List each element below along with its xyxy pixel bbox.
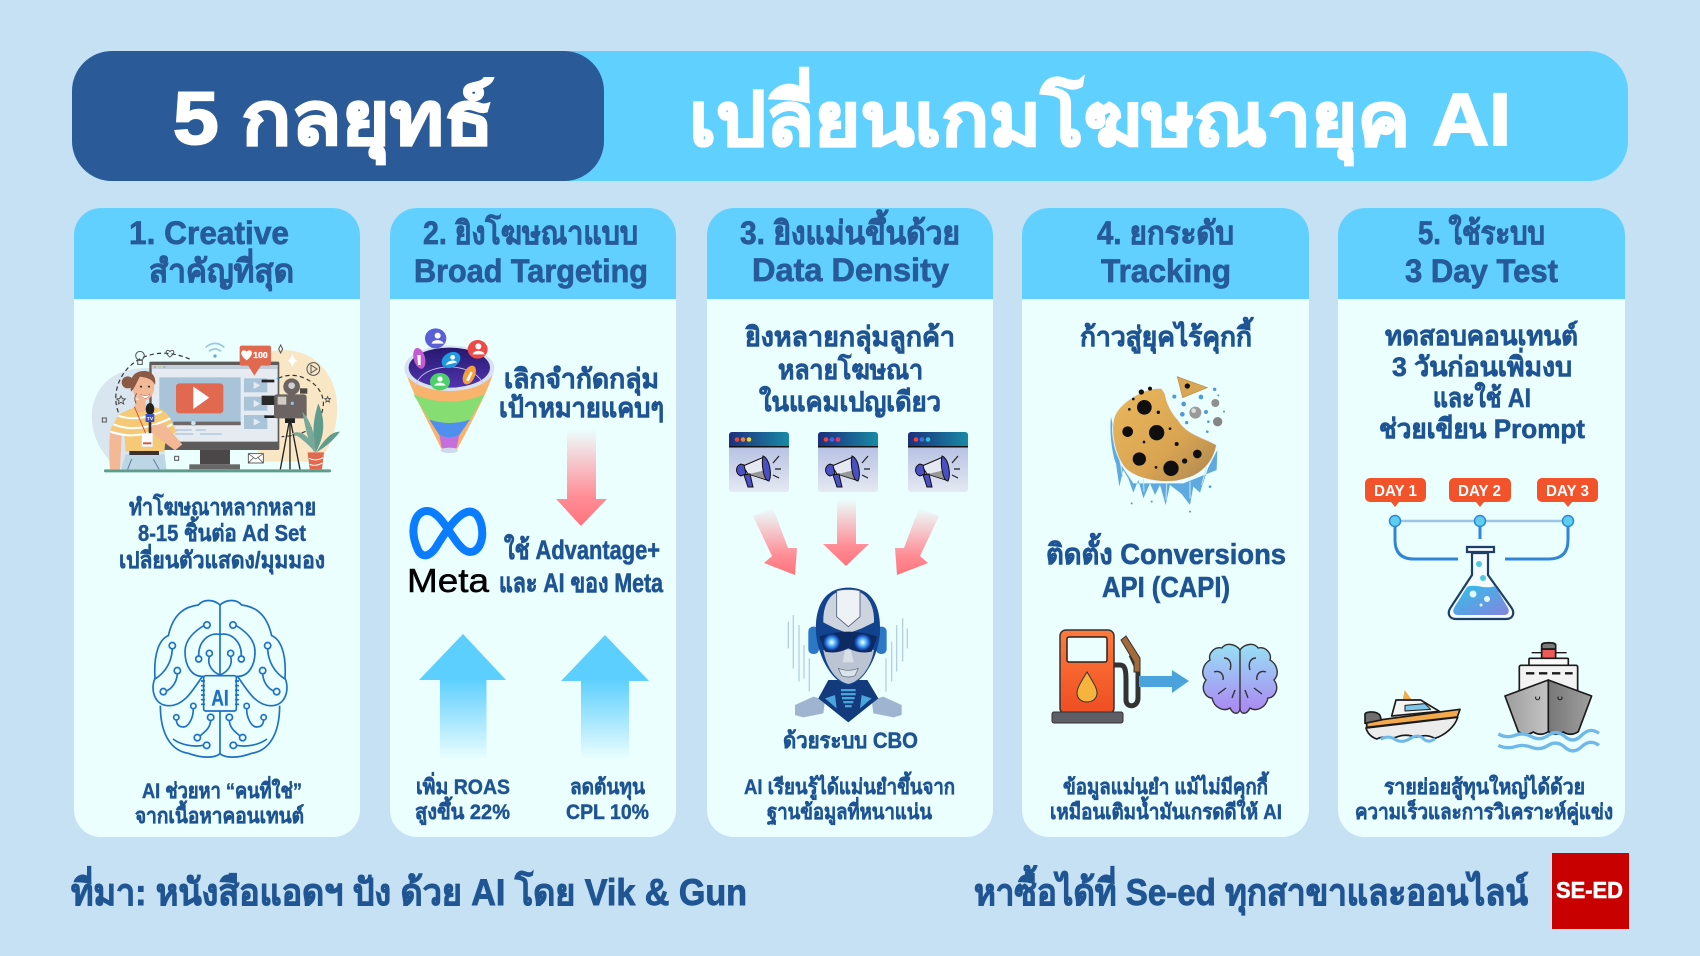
title banner [72, 51, 1628, 181]
text: multiple audiences: ในแคมเปญเดียว [759, 386, 941, 418]
badge: day 2: DAY 2 [1458, 483, 1501, 500]
text: accurate data: ข้อมูลแม่นยำ แม้ไม่มีคุกกี้ [1063, 771, 1270, 801]
text: CPL down 10% [566, 775, 649, 824]
text: test content 3 days: และใช้ AI [1433, 382, 1531, 413]
arrow: CPL up [561, 635, 649, 760]
text: test content 3 days: ช่วยเขียน Prompt [1379, 414, 1585, 444]
footer: source: ที่มา: หนังสือแอดฯ ปัง ด้วย AI โดย Vik & Gun [71, 866, 747, 913]
text: ad variety [119, 493, 325, 575]
icon: ad window 2 [818, 432, 878, 492]
icon: AI brain circuit: AI [211, 685, 229, 710]
text: AI learns better [744, 771, 955, 826]
heading 3 [740, 209, 960, 288]
logo: SE-ED [1552, 853, 1629, 929]
heading 1: 1. Creative [129, 215, 289, 251]
heading 5: 5. ใช้ระบบ [1418, 214, 1545, 251]
heading 3: Data Density [752, 252, 949, 288]
text: small vs big: รายย่อยสู้ทุนใหญ่ได้ด้วย [1384, 774, 1585, 801]
text: ad variety: เปลี่ยนตัวแสดง/มุมมอง [119, 543, 325, 575]
heading 1 [129, 215, 294, 292]
text: small vs big [1355, 774, 1613, 826]
illustration: melting cookie [1110, 377, 1225, 513]
text: AI learns better: ฐานข้อมูลที่หนาแน่น [767, 796, 933, 826]
icon: Meta logo [407, 511, 490, 599]
text: install conversions API: API (CAPI) [1102, 572, 1230, 604]
camera [262, 381, 275, 417]
text: install conversions API: ติดตั้ง Conversions [1046, 532, 1286, 571]
badge: day 3: DAY 3 [1546, 483, 1589, 500]
text: ad variety: 8-15 ชิ้นต่อ Ad Set [138, 516, 306, 546]
badge: day 3 [1537, 478, 1598, 507]
badge: day 1 [1365, 478, 1426, 507]
text: use Advantage+: และ AI ของ Meta [499, 568, 664, 598]
logo: SE-ED: SE-ED [1556, 877, 1623, 903]
text: test content 3 days [1379, 320, 1585, 444]
heading 5: 3 Day Test [1405, 253, 1558, 289]
badge: day 1: DAY 1 [1374, 483, 1417, 500]
woman [109, 432, 122, 469]
text: CPL down 10%: CPL 10% [566, 801, 649, 824]
arrow: pump to brain [1139, 670, 1189, 693]
text: with CBO: ด้วยระบบ CBO [783, 728, 918, 753]
illustration: creator filming video: 100 [253, 351, 268, 360]
arrow: red down centre [823, 499, 869, 566]
icon: gradient brain [1203, 644, 1277, 713]
icon: flask [1449, 547, 1513, 619]
icon: small boat [1365, 690, 1460, 741]
text: small vs big: ความเร็วและการวิเคราะห์คู่แข่ง [1355, 798, 1613, 826]
heading 4: 4. ยกระดับ [1097, 215, 1234, 251]
illustration: creator filming video: TV [147, 416, 154, 422]
text: stop narrow targeting [499, 364, 664, 423]
heading 2: Broad Targeting [414, 253, 648, 289]
text: AI finds the right people: จากเนื้อหาคอนเทนต์ [135, 800, 304, 828]
text: install conversions API [1046, 532, 1286, 604]
arrow: ROAS up [419, 634, 506, 760]
text: test content 3 days: 3 วันก่อนเพิ่มงบ [1392, 347, 1572, 382]
heading 4: Tracking [1101, 253, 1231, 289]
text: accurate data: เหมือนเติมน้ำมันเกรดดีให้ AI [1050, 796, 1282, 824]
illustration: creator filming video [92, 343, 340, 472]
text: accurate data [1050, 771, 1282, 824]
text: multiple audiences: ยิงหลายกลุ่มลูกค้า [745, 322, 955, 354]
arrow: red diagonal right [895, 508, 939, 575]
heading 4 [1097, 215, 1234, 289]
icon: AI brain circuit [153, 600, 287, 757]
panel 3: data density [707, 208, 993, 837]
icon: large ship [1498, 643, 1599, 751]
text: test content 3 days: ทดสอบคอนเทนต์ [1385, 320, 1578, 351]
icon: rainbow funnel [404, 328, 494, 453]
text: use Advantage+: ใช้ Advantage+ [504, 534, 660, 565]
text: use Advantage+ [499, 534, 664, 598]
text: stop narrow targeting: เป้าหมายแคบๆ [499, 393, 664, 423]
panel 4: tracking [1022, 208, 1309, 837]
text: AI learns better: AI เรียนรู้ได้แม่นยำขึ้นจาก [744, 771, 955, 801]
plant [291, 432, 316, 452]
text: multiple audiences: หลายโฆษณา [778, 353, 923, 385]
heading 2 [414, 214, 648, 289]
text: ROAS up 22% [415, 771, 510, 826]
panel 1: creative [74, 208, 360, 837]
text: CPL down 10%: ลดต้นทุน [570, 775, 646, 801]
diagram: connectors and nodes [1390, 516, 1574, 559]
title left: 5 strategies: 5 กลยุทธ์ [173, 77, 494, 165]
text: ad variety: ทำโฆษณาหลากหลาย [129, 493, 316, 520]
arrow: red diagonal left [753, 508, 797, 575]
icon: ad window 1 [729, 432, 789, 492]
text: AI finds the right people: AI ช่วยหา “คนที่ใช่” [142, 775, 302, 803]
illustration: AI robot head [788, 588, 907, 722]
badge: day 2 [1449, 478, 1511, 507]
text: multiple audiences [745, 322, 955, 418]
panel 2: broad targeting [390, 208, 676, 837]
icon: ad window 3 [908, 432, 968, 492]
text: cookieless era: ก้าวสู่ยุคไร้คุกกี้ [1080, 316, 1254, 354]
heading 2: 2. ยิงโฆษณาแบบ [423, 214, 638, 251]
heading 1: สำคัญที่สุด [149, 248, 294, 292]
heading 5 [1405, 214, 1558, 289]
footer: where to buy: หาซื้อได้ที่ Se-ed ทุกสาขาและออนไลน์ [974, 865, 1528, 916]
heading 3: 3. ยิงแม่นขึ้นด้วย [740, 209, 960, 251]
text: ROAS up 22%: เพิ่ม ROAS [416, 771, 510, 799]
arrow: red down [556, 429, 607, 526]
icon: fuel pump [1052, 630, 1140, 723]
title right: changing the ad game: เปลี่ยนเกมโฆษณายุค AI [689, 67, 1511, 166]
text: stop narrow targeting: เลิกจำกัดกลุ่ม [504, 364, 659, 396]
icon: Meta logo: Meta [407, 562, 490, 599]
panel 5: 3 day test [1338, 208, 1625, 837]
text: ROAS up 22%: สูงขึ้น 22% [415, 796, 510, 826]
text: AI finds the right people [135, 775, 304, 828]
